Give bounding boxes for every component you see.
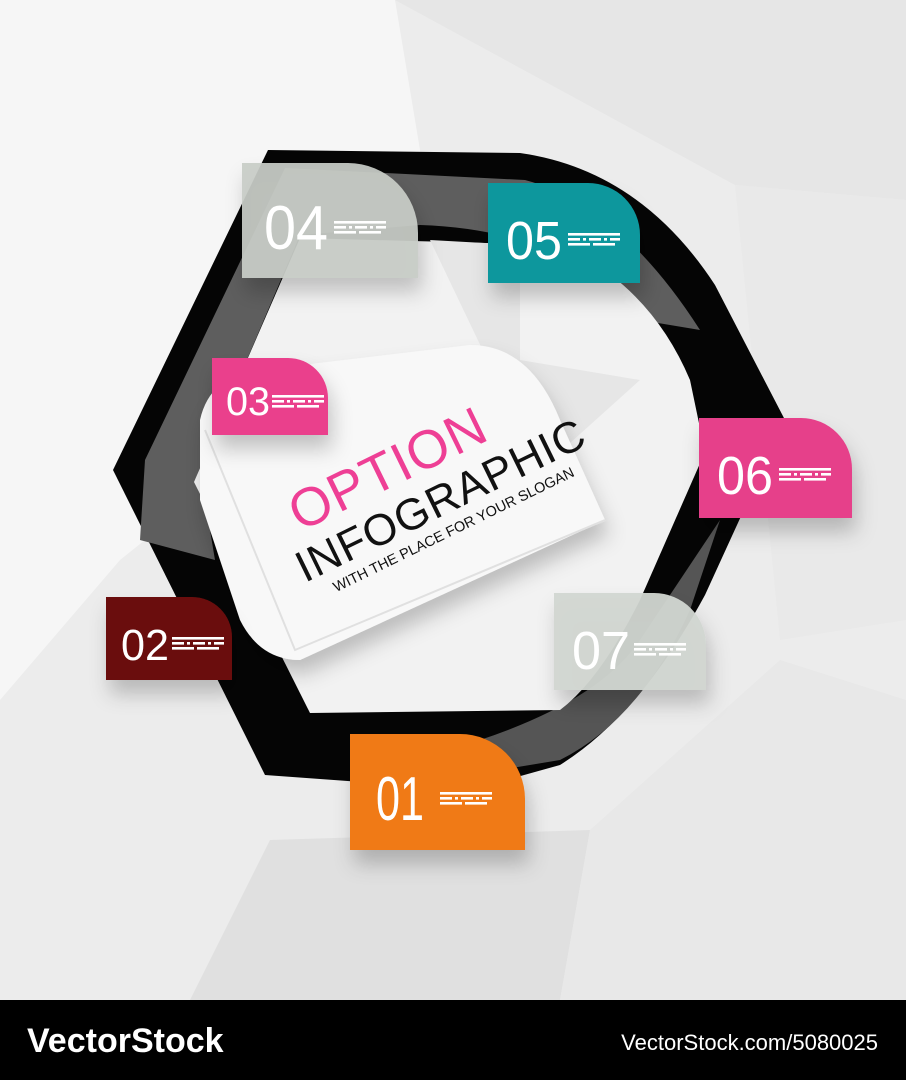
- footer bar: [0, 1000, 906, 1080]
- tab 07: 07: [572, 621, 630, 681]
- tab 04: [242, 163, 418, 278]
- tab 02: 02: [121, 621, 169, 670]
- center card: [200, 345, 605, 660]
- footer bar: VectorStock.com/5080025: [621, 1030, 878, 1055]
- tab 03: 03: [226, 380, 270, 424]
- tab 06: 06: [717, 446, 773, 506]
- tab 01: 01: [376, 765, 424, 834]
- tab 06: [699, 418, 852, 518]
- tab 05: 05: [506, 211, 562, 271]
- tab 07: [554, 593, 706, 690]
- title text: WITH THE PLACE FOR YOUR SLOGAN: [331, 465, 577, 596]
- tab 03: [212, 358, 328, 435]
- tab 05: [488, 183, 640, 283]
- tab 02: [106, 597, 232, 680]
- tab 04: 04: [264, 194, 328, 263]
- footer bar: VectorStock: [27, 1022, 224, 1060]
- tab 01: [350, 734, 525, 850]
- hexagon ring: [113, 150, 785, 790]
- title text: OPTION: [279, 395, 497, 543]
- title text: INFOGRAPHIC: [288, 409, 594, 592]
- title text: [263, 358, 601, 606]
